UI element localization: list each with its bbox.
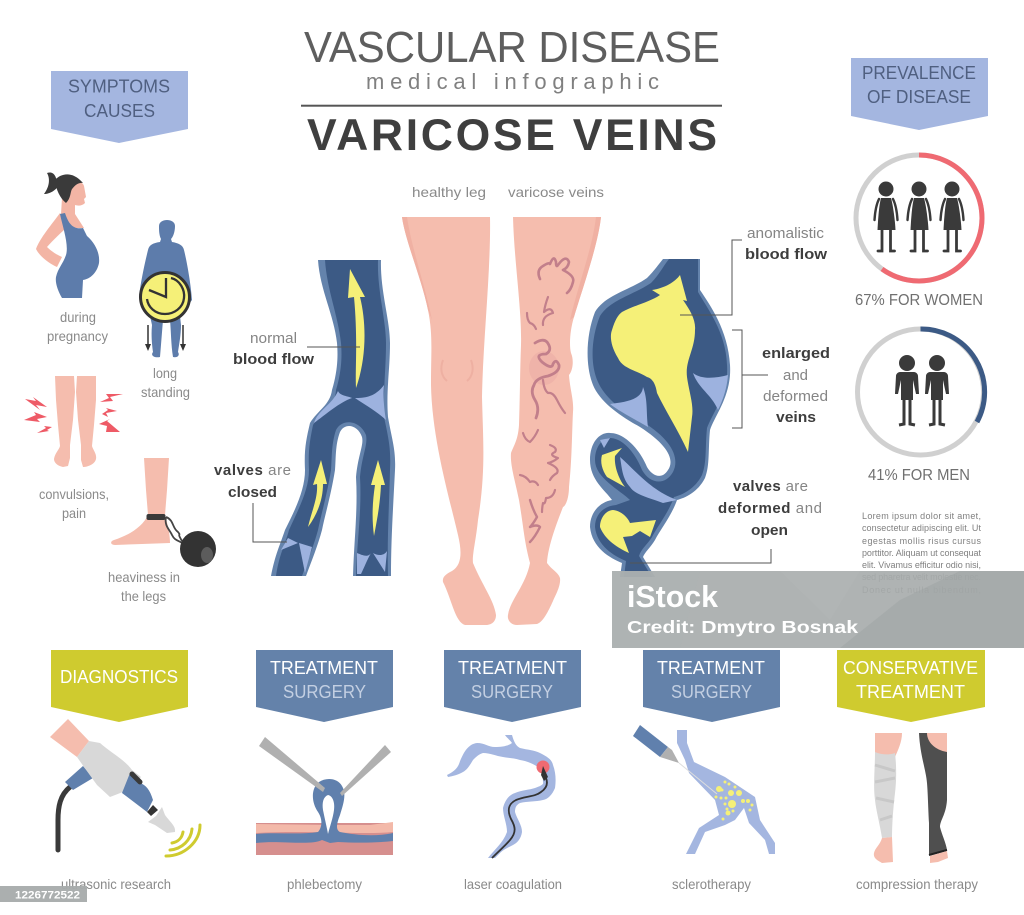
callout: valves are deformed and open: open bbox=[751, 522, 788, 539]
banner: symptoms causes: SYMPTOMS bbox=[68, 76, 170, 96]
blood pool lower small bbox=[600, 510, 656, 553]
banner: treatment surgery 3 bbox=[643, 650, 780, 722]
text block: lorem ipsum bbox=[862, 511, 982, 595]
label: healthy leg: healthy leg bbox=[412, 184, 486, 200]
vein body bbox=[588, 259, 730, 577]
label: compression therapy: compression therapy bbox=[856, 876, 978, 892]
blood pool upper small bbox=[601, 448, 625, 487]
callout: valves are deformed and open: valves are bbox=[733, 478, 808, 495]
valves bbox=[281, 385, 387, 574]
banner: conservative treatment: CONSERVATIVE bbox=[843, 658, 978, 678]
banner: treatment surgery 3: SURGERY bbox=[671, 682, 752, 702]
watermark logo: iStock bbox=[627, 579, 719, 614]
banner: treatment surgery 2: SURGERY bbox=[471, 682, 553, 702]
text block: lorem ipsum: elit. Vivamus efficitur odio nisi, bbox=[862, 560, 981, 570]
callout: anomalistic blood flow bbox=[680, 225, 827, 315]
banner: treatment surgery 1: TREATMENT bbox=[270, 658, 378, 678]
icon: phlebectomy bbox=[256, 737, 393, 855]
title block bbox=[301, 23, 722, 160]
label: laser coagulation: laser coagulation bbox=[464, 876, 562, 892]
watermark: image id bbox=[0, 886, 87, 902]
illustration: varicose veins leg bbox=[508, 217, 601, 625]
callout: valves are deformed and open: deformed and bbox=[718, 500, 822, 517]
callout: enlarged and deformed veins: enlarged bbox=[762, 345, 830, 362]
text block: lorem ipsum: Lorem ipsum dolor sit amet, bbox=[862, 511, 981, 521]
banner: treatment surgery 3: TREATMENT bbox=[657, 658, 765, 678]
text block: lorem ipsum: egestas mollis risus cursus bbox=[862, 536, 982, 546]
watermark banner bbox=[612, 571, 1024, 648]
illustration: healthy vein diagram bbox=[271, 260, 395, 576]
callout: enlarged and deformed veins: and bbox=[783, 367, 808, 384]
illustration: varicose vein diagram bbox=[588, 259, 730, 577]
icon: two men bbox=[895, 355, 949, 425]
label: convulsions, pain bbox=[39, 486, 109, 521]
subtitle: medical infographic bbox=[366, 69, 659, 94]
dress bbox=[56, 213, 99, 298]
heading: varicose veins: VARICOSE VEINS bbox=[307, 111, 717, 160]
hair bbox=[55, 174, 83, 203]
icon: pregnant woman bbox=[36, 173, 99, 298]
label: heaviness in the legs: the legs bbox=[121, 588, 166, 604]
label: varicose veins: varicose veins bbox=[508, 184, 604, 200]
banner: conservative treatment bbox=[837, 650, 985, 722]
label: 41% for men: 41% FOR MEN bbox=[868, 467, 970, 484]
callout: enlarged and deformed veins: veins bbox=[776, 409, 816, 426]
vein interior bbox=[276, 260, 390, 576]
banner: symptoms causes bbox=[51, 71, 188, 143]
icon: laser coagulation bbox=[447, 735, 556, 858]
chart: 67% for women bbox=[856, 155, 982, 281]
banner: treatment surgery 1: SURGERY bbox=[283, 682, 366, 702]
vein interior bbox=[593, 259, 727, 577]
banner: diagnostics: DIAGNOSTICS bbox=[60, 667, 178, 687]
watermark credit: Credit: Dmytro Bosnak bbox=[627, 617, 858, 637]
label: heaviness in the legs bbox=[108, 569, 180, 604]
callout: enlarged and deformed veins bbox=[732, 330, 830, 428]
icon: painful legs with lightning bbox=[24, 376, 123, 467]
banner: prevalence of disease bbox=[851, 58, 988, 130]
label: phlebectomy: phlebectomy bbox=[287, 876, 362, 892]
banner: diagnostics bbox=[51, 650, 188, 722]
chart: 41% for men bbox=[858, 329, 985, 455]
banner: treatment surgery 2: TREATMENT bbox=[458, 658, 567, 678]
banner: prevalence of disease: PREVALENCE bbox=[862, 63, 976, 83]
face and neck bbox=[61, 182, 86, 228]
banner: treatment surgery 2 bbox=[444, 650, 581, 722]
callout: anomalistic blood flow: anomalistic bbox=[747, 225, 825, 242]
text block: lorem ipsum: consectetur adipiscing elit. Ut bbox=[862, 523, 981, 533]
vein wall bbox=[271, 260, 395, 576]
callout: normal blood flow: blood flow bbox=[233, 351, 314, 368]
label: long standing bbox=[141, 365, 190, 400]
text block: lorem ipsum: Donec ut nulla bibendum, bbox=[862, 585, 981, 595]
label: during pregnancy: during bbox=[60, 309, 96, 325]
icon: compression bandage and stocking bbox=[874, 733, 948, 863]
label: ultrasonic research: ultrasonic research bbox=[61, 876, 171, 892]
banner: conservative treatment: TREATMENT bbox=[856, 682, 965, 702]
arrow: left branch flow up bbox=[308, 460, 327, 527]
callout: enlarged and deformed veins: deformed bbox=[763, 388, 828, 405]
label: long standing: long bbox=[153, 365, 177, 381]
label: 67% for women: 67% FOR WOMEN bbox=[855, 292, 983, 309]
label: convulsions, pain: pain bbox=[62, 505, 86, 521]
text block: lorem ipsum: porttitor. Aliquam ut consequat bbox=[862, 548, 981, 558]
title: vascular disease: VASCULAR DISEASE bbox=[304, 23, 720, 72]
arm bbox=[36, 213, 68, 267]
icon: ultrasound probe bbox=[50, 719, 200, 856]
callout: anomalistic blood flow: blood flow bbox=[745, 246, 827, 263]
callout: normal blood flow: normal bbox=[250, 330, 297, 347]
label: sclerotherapy: sclerotherapy bbox=[672, 876, 751, 892]
label: long standing: standing bbox=[141, 384, 190, 400]
callout: valves are closed: closed bbox=[228, 484, 277, 501]
label: during pregnancy: pregnancy bbox=[47, 328, 108, 344]
label: convulsions, pain: convulsions, bbox=[39, 486, 109, 502]
icon: leg with ball and chain bbox=[111, 458, 216, 567]
callout: normal blood flow bbox=[233, 330, 360, 368]
valves deformed bbox=[600, 373, 728, 503]
text block: lorem ipsum: sed pharetra velit molestie nec. bbox=[862, 572, 981, 582]
callout: valves are closed: valves are bbox=[214, 462, 291, 479]
illustration: healthy leg bbox=[402, 217, 496, 625]
arrow: right branch flow up bbox=[371, 460, 385, 536]
label: heaviness in the legs: heaviness in bbox=[108, 569, 180, 585]
compression stocking leg bbox=[920, 733, 947, 752]
label: during pregnancy bbox=[47, 309, 108, 344]
icon: sclerotherapy bbox=[633, 725, 775, 854]
bandaged leg bbox=[875, 733, 902, 757]
blood pool large bbox=[611, 275, 695, 452]
banner: symptoms causes: CAUSES bbox=[84, 101, 155, 121]
callout: valves are closed bbox=[214, 462, 291, 542]
icon: three women bbox=[874, 182, 964, 251]
banner: prevalence of disease: OF DISEASE bbox=[867, 87, 971, 107]
banner: treatment surgery 1 bbox=[256, 650, 393, 722]
callout: valves are deformed and open bbox=[630, 478, 822, 563]
arrow: main flow up bbox=[348, 269, 365, 388]
watermark: image id: 1226772522 bbox=[15, 890, 80, 902]
icon: long standing figure with clock bbox=[139, 220, 192, 357]
